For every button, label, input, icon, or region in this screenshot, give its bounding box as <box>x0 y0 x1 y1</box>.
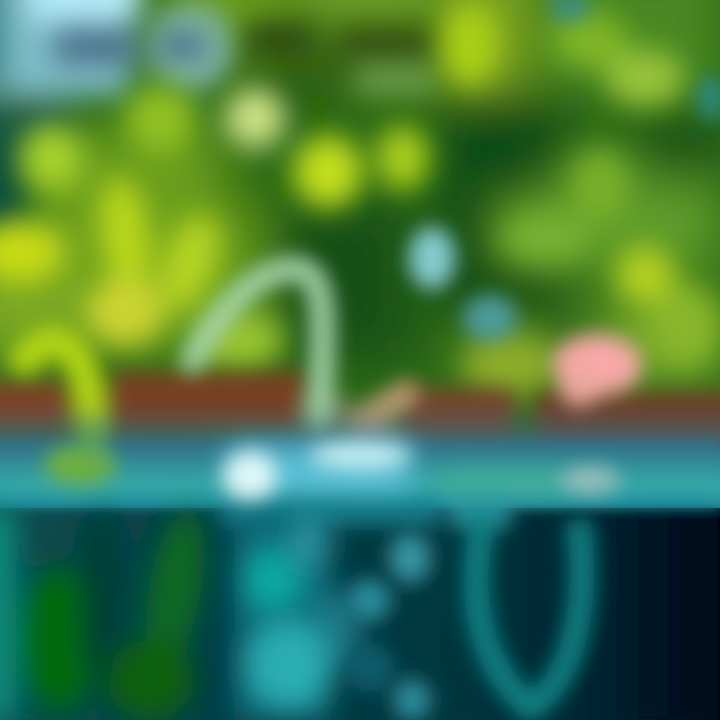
pink flower <box>553 335 641 406</box>
bubbles and teal water column <box>235 514 360 720</box>
blurred heading smudges <box>55 22 436 94</box>
tan stone <box>340 378 420 448</box>
curved stem <box>192 269 323 425</box>
bright leaves <box>0 3 720 395</box>
water surface band <box>0 425 720 506</box>
blue drops in foliage <box>410 0 720 340</box>
soil band <box>0 372 720 444</box>
left sprout <box>25 341 92 430</box>
surface highlights <box>44 425 620 500</box>
sky patch <box>0 0 232 230</box>
foliage background <box>0 0 720 440</box>
small bubbles <box>346 534 430 720</box>
deep water <box>0 500 720 720</box>
green water plants <box>0 507 214 720</box>
teal loop <box>476 516 582 708</box>
